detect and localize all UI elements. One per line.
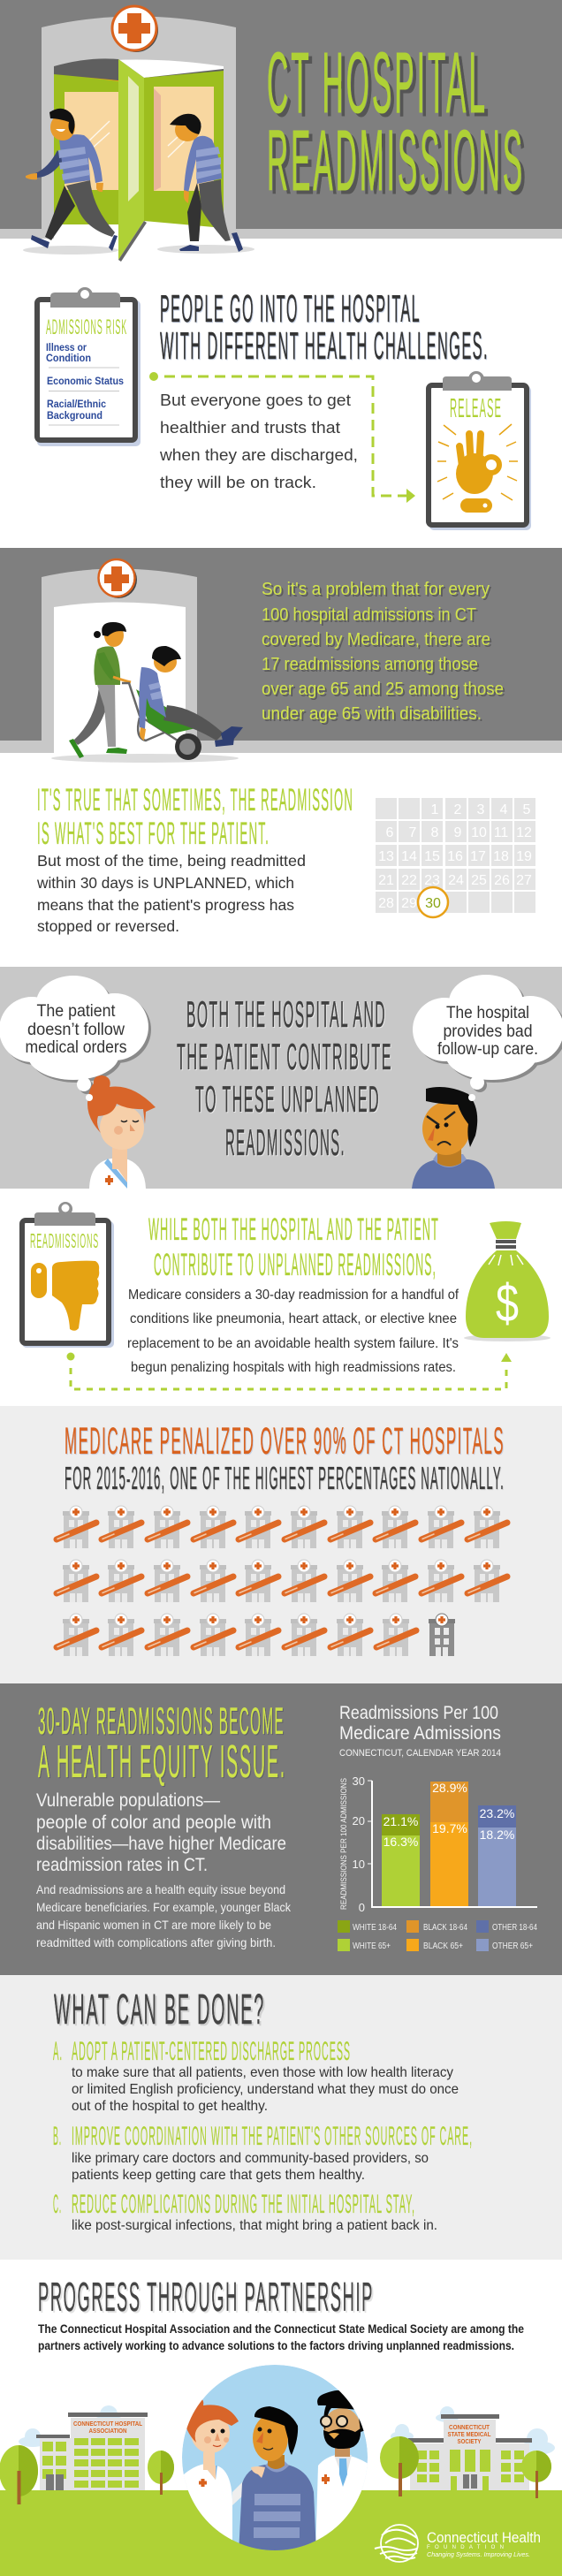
calendar: 30 days: 18 bbox=[493, 849, 509, 864]
recommendation B: like primary care doctors and community-based providers, so bbox=[72, 2151, 429, 2166]
building: Connecticut State Medical Society bbox=[408, 2414, 532, 2490]
calendar: 30 days: 27 bbox=[516, 873, 532, 888]
calendar: 30 days: 22 bbox=[401, 873, 417, 888]
chart title: CONNECTICUT, CALENDAR YEAR 2014 bbox=[339, 1748, 501, 1759]
calendar: 30 days: 23 bbox=[424, 873, 440, 888]
section background: what can be done bbox=[0, 1975, 562, 2260]
text block: beyond medicare: and Hispanic women in CT are more likely to be bbox=[36, 1918, 271, 1932]
trees bbox=[0, 2436, 551, 2504]
recommendation C bbox=[53, 2190, 437, 2233]
bars: 28.9% bbox=[432, 1781, 467, 1795]
calendar: 30 days: 6 bbox=[386, 825, 394, 840]
thought bubble: hospital bad follow-up: provides bad bbox=[444, 1022, 532, 1041]
bars bbox=[382, 1781, 516, 1906]
calendar: 30 days: 4 bbox=[500, 802, 508, 817]
ground bbox=[0, 2490, 562, 2576]
recommendation A: out of the hospital to get healthy. bbox=[72, 2099, 268, 2114]
calendar: 30 days: 17 bbox=[470, 849, 486, 864]
section background: wheelbarrow wall bbox=[0, 548, 562, 741]
calendar: 30 days: 30 bbox=[425, 896, 441, 911]
logo: Connecticut Health Foundation: Changing Systems. Improving Lives. bbox=[427, 2552, 530, 2558]
text block: unplanned readmission: But most of the time, being readmitted bbox=[37, 852, 306, 870]
calendar: 30 days: 7 bbox=[409, 825, 417, 840]
clipboard: admissions risk: Illness or bbox=[46, 343, 87, 353]
logo: Connecticut Health Foundation: FOUNDATION bbox=[427, 2545, 504, 2550]
thought bubble: hospital bad follow-up: The hospital bbox=[446, 1004, 529, 1022]
text block: everyone goes to get healthier: healthier and trusts that bbox=[160, 419, 340, 437]
thought bubble: patient doesn't follow orders: The patient bbox=[37, 1002, 116, 1021]
calendar: 30 days: 29 bbox=[401, 896, 417, 911]
calendar: 30 days: 26 bbox=[494, 873, 510, 888]
heading: both the hospital and the patient bbox=[177, 993, 392, 1163]
text block: beyond medicare: readmitted with complications after giving birth. bbox=[36, 1935, 276, 1949]
text block: vulnerable populations: disabilities—have higher Medicare bbox=[36, 1834, 286, 1854]
text block: everyone goes to get healthier: when they are discharged, bbox=[159, 446, 358, 464]
legend: WHITE 65+ bbox=[353, 1941, 391, 1951]
icon: medical cross sign bbox=[112, 6, 158, 52]
section background: health equity bbox=[0, 1683, 562, 1975]
calendar: 30 days: 1 bbox=[431, 802, 439, 817]
thought bubble: hospital bad follow-up bbox=[413, 975, 562, 1092]
building: Connecticut Hospital Association bbox=[36, 2413, 148, 2490]
calendar: 30 days: 9 bbox=[454, 825, 462, 840]
text block: problem statistic: So it's a problem that for every bbox=[262, 579, 490, 599]
text block: unplanned readmission bbox=[36, 852, 306, 935]
legend: OTHER 65+ bbox=[492, 1941, 533, 1951]
clipboard: admissions risk: Racial/Ethnic bbox=[47, 399, 107, 410]
icon: money bag: $ bbox=[496, 1273, 519, 1333]
section background: medicare penalized bbox=[0, 1406, 562, 1683]
section background: both contribute bbox=[0, 967, 562, 1189]
calendar: 30 days: 21 bbox=[378, 873, 394, 888]
pictogram: 29 penalized hospitals and 1 not bbox=[57, 1506, 507, 1656]
text block: vulnerable populations: Vulnerable populations— bbox=[36, 1790, 220, 1811]
text block: medicare penalties: begun penalizing hospitals with high readmissions rates. bbox=[131, 1360, 456, 1375]
calendar: 30 days: 3 bbox=[477, 802, 485, 817]
text: READMISSIONS bbox=[30, 1229, 99, 1252]
calendar: 30 days: 10 bbox=[471, 825, 487, 840]
recommendation B: B. bbox=[53, 2122, 62, 2151]
clipboard: release with OK hand bbox=[429, 371, 531, 530]
text block: problem statistic: 100 hospital admissions in CT bbox=[262, 604, 476, 625]
clipboard: admissions risk: Background bbox=[47, 411, 103, 422]
bars: 21.1% bbox=[384, 1814, 418, 1828]
text block: medicare penalties: Medicare considers a 30-day readmission for a handful of bbox=[128, 1288, 459, 1303]
calendar: 30 days: 19 bbox=[516, 849, 532, 864]
icon: money bag bbox=[464, 1221, 551, 1341]
recommendation A: A. bbox=[53, 2037, 63, 2066]
text block: beyond medicare bbox=[36, 1882, 292, 1949]
legend: WHITE 18-64 bbox=[353, 1923, 397, 1933]
calendar: 30 days: 5 bbox=[523, 802, 531, 817]
text block: unplanned readmission: stopped or reversed. bbox=[37, 917, 179, 935]
legend: BLACK 18-64 bbox=[423, 1923, 467, 1933]
text block: beyond medicare: And readmissions are a health equity issue beyond bbox=[36, 1882, 285, 1896]
calendar: 30 days: 14 bbox=[401, 849, 417, 864]
text block: vulnerable populations: readmission rates in CT. bbox=[36, 1855, 208, 1875]
illustration: circle vignette with nurse, patient and doctor bbox=[182, 2365, 371, 2554]
clipboard: readmissions thumbs down bbox=[22, 1202, 114, 1348]
recommendation B bbox=[53, 2122, 473, 2183]
calendar: 30 days: 25 bbox=[471, 873, 487, 888]
recommendation A: to make sure that all patients, even those with low health literacy bbox=[72, 2065, 453, 2080]
bars: 23.2% bbox=[480, 1806, 514, 1820]
text block: medicare penalties bbox=[127, 1288, 459, 1375]
recommendation C: like post-surgical infections, that might bring a patient back in. bbox=[72, 2218, 437, 2233]
recommendation A bbox=[53, 2037, 459, 2114]
text block: vulnerable populations bbox=[36, 1790, 286, 1875]
illustration: angry patient bbox=[412, 1087, 495, 1189]
text block: beyond medicare: Medicare beneficiaries. For example, younger Black bbox=[36, 1900, 292, 1914]
thought bubble: patient doesn't follow orders bbox=[0, 976, 151, 1094]
chart title: Medicare Admissions bbox=[339, 1723, 501, 1744]
calendar: 30 days bbox=[376, 798, 535, 917]
illustration: smiling patient leaving bbox=[23, 109, 118, 255]
text block: everyone goes to get healthier: But everyone goes to get bbox=[160, 391, 351, 409]
text block: medicare penalties: conditions like pneumonia, heart attack, or elective knee bbox=[130, 1311, 457, 1326]
building: Connecticut State Medical Society: CONNECTICUT bbox=[449, 2423, 490, 2431]
calendar: 30 days: 15 bbox=[424, 849, 440, 864]
illustration: nurse with closed eyes bbox=[86, 1075, 156, 1189]
axis bbox=[353, 1774, 537, 1914]
recommendation A: or limited English proficiency, understand what they must do once bbox=[72, 2082, 459, 2097]
heading: while both contribute bbox=[148, 1212, 439, 1282]
text block: vulnerable populations: people of color and people with bbox=[36, 1812, 271, 1833]
axis: 20 bbox=[353, 1814, 365, 1828]
section background: header sidewalk bbox=[0, 229, 562, 239]
legend bbox=[338, 1920, 537, 1951]
section background: wheelbarrow sidewalk bbox=[0, 741, 562, 753]
axis: 10 bbox=[353, 1858, 365, 1871]
chart title: Readmissions Per 100 bbox=[339, 1703, 498, 1723]
calendar: 30 days: 13 bbox=[378, 849, 394, 864]
calendar: 30 days: 12 bbox=[516, 825, 532, 840]
text: READMISSIONS. bbox=[225, 1121, 346, 1163]
arrow: dashed line from clipboard to bag bbox=[67, 1352, 512, 1389]
clipboard: admissions risk: Condition bbox=[46, 353, 91, 364]
title bbox=[267, 34, 525, 209]
text: WHAT CAN BE DONE? bbox=[54, 1987, 265, 2033]
illustration: hospital doorway bbox=[42, 559, 197, 753]
doctor bbox=[316, 2390, 368, 2541]
text block: problem statistic bbox=[262, 579, 504, 724]
logo: Connecticut Health Foundation: Connecticut Health bbox=[427, 2529, 541, 2546]
heading: people go into the hospital bbox=[160, 287, 489, 368]
calendar: 30 days: 11 bbox=[494, 825, 508, 840]
chart title bbox=[339, 1703, 501, 1759]
heading: health equity issue bbox=[38, 1700, 286, 1788]
recommendation C: C. bbox=[53, 2190, 62, 2219]
text block: unplanned readmission: means that the patient's progress has bbox=[37, 896, 294, 914]
calendar: 30 days: 16 bbox=[447, 849, 463, 864]
arrow: dashed path to release bbox=[149, 372, 415, 503]
text block: unplanned readmission: within 30 days is UNPLANNED, which bbox=[36, 874, 294, 892]
text block: partners bbox=[38, 2321, 524, 2352]
building: Connecticut Hospital Association: ASSOCIATION bbox=[88, 2427, 127, 2435]
text block: medicare penalties: replacement to be an avoidable health system failure. It's bbox=[127, 1336, 459, 1351]
logo: Connecticut Health Foundation bbox=[375, 2525, 541, 2562]
thought bubble: hospital bad follow-up: follow-up care. bbox=[437, 1040, 538, 1059]
text block: problem statistic: over age 65 and 25 among those bbox=[262, 679, 504, 699]
building: Connecticut State Medical Society: SOCIETY bbox=[458, 2437, 481, 2445]
illustration: hospital entrance with revolving door bbox=[42, 16, 236, 262]
calendar: 30 days: 28 bbox=[378, 896, 394, 911]
illustration: sad patient returning bbox=[157, 114, 254, 254]
building: Connecticut Hospital Association: CONNECTICUT HOSPITAL bbox=[73, 2420, 142, 2428]
clipboard: admissions risk: Economic Status bbox=[47, 376, 124, 387]
patient bbox=[239, 2406, 316, 2554]
text block: problem statistic: 17 readmissions among those bbox=[262, 654, 478, 674]
bars: 19.7% bbox=[432, 1821, 467, 1835]
bars: 16.3% bbox=[384, 1835, 418, 1849]
section background: header wall bbox=[0, 0, 562, 229]
calendar: 30 days: 2 bbox=[454, 802, 462, 817]
thought bubble: patient doesn't follow orders: doesn’t follow bbox=[27, 1021, 125, 1039]
y axis label: READMISSIONS PER 100 ADMISSIONS bbox=[339, 1778, 349, 1910]
clouds bbox=[19, 2405, 555, 2455]
text block: problem statistic: covered by Medicare, there are bbox=[262, 629, 490, 650]
thought bubble: patient doesn't follow orders: medical orders bbox=[25, 1038, 127, 1057]
text: ADMISSIONS RISK bbox=[46, 315, 127, 339]
building: Connecticut State Medical Society: STATE MEDICAL bbox=[447, 2430, 491, 2438]
axis: 30 bbox=[353, 1774, 365, 1788]
axis: 0 bbox=[359, 1901, 365, 1914]
clipboard: admissions risk bbox=[37, 287, 140, 446]
nurse bbox=[184, 2400, 243, 2540]
calendar: 30 days: 8 bbox=[431, 825, 439, 840]
text block: everyone goes to get healthier bbox=[159, 391, 358, 491]
heading: the readmission is what's best bbox=[37, 783, 353, 851]
text block: problem statistic: under age 65 with disabilities. bbox=[262, 703, 482, 724]
legend: OTHER 18-64 bbox=[492, 1923, 537, 1933]
legend: BLACK 65+ bbox=[423, 1941, 463, 1951]
recommendation B: patients keep getting care that gets them healthy. bbox=[72, 2168, 365, 2183]
bars: 18.2% bbox=[480, 1828, 514, 1842]
illustration: woman pushing patient in wheelbarrow bbox=[51, 622, 243, 763]
calendar: 30 days: 24 bbox=[448, 873, 464, 888]
chart: readmissions per 100 medicare admissions bbox=[338, 1703, 537, 1951]
text block: everyone goes to get healthier: they will be on track. bbox=[160, 474, 316, 491]
